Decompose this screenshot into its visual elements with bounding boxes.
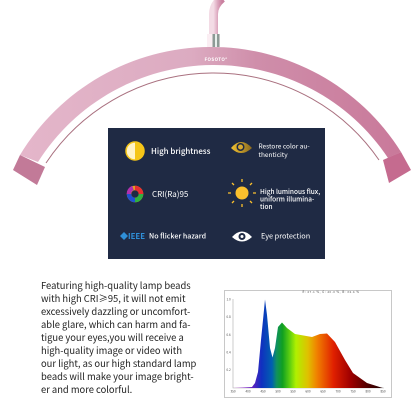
spectrum curve [233, 300, 383, 388]
label: luminous flux: High luminous flux, [260, 186, 320, 196]
spectrum chart [224, 290, 392, 398]
x axis labels: 550 [290, 390, 296, 394]
description text: able glare, which can harm and fa- [41, 317, 190, 331]
axes [233, 299, 384, 388]
lamp [13, 0, 411, 185]
description text: er and more colorful. [41, 382, 132, 396]
x axis labels: 450 [260, 390, 266, 394]
x axis labels [230, 390, 386, 394]
x axis labels: 650 [320, 390, 326, 394]
description text: with high CRI≥95, it will not emit [41, 291, 186, 305]
icon: gold eye [231, 142, 252, 153]
description text: high-quality image or video with [41, 343, 182, 357]
label: eye protection: Eye protection [261, 232, 310, 242]
description text: tigue your eyes,you will receive a [41, 330, 184, 344]
lamp stem [207, 0, 222, 47]
label: luminous flux: uniform illumina- [260, 194, 315, 204]
y axis labels: 0.2 [226, 368, 231, 372]
icon: IEEE logo [120, 231, 145, 242]
lamp arc band [20, 47, 401, 162]
x axis labels: 750 [350, 390, 356, 394]
y axis labels [226, 298, 231, 372]
label: no flicker: No flicker hazard [149, 232, 206, 242]
y axis labels: 0.8 [226, 315, 231, 319]
description text: beads will make your image bright- [41, 369, 194, 383]
label: restore colour: thenticity [258, 149, 288, 159]
description text: excessively dazzling or uncomfort- [41, 304, 190, 318]
label: high brightness: High brightness [151, 146, 211, 157]
icon: sun [228, 179, 256, 207]
brand label: FOSOTO° [205, 57, 227, 63]
icon: white eye [232, 232, 252, 242]
inner diffuser line [46, 73, 379, 163]
icon: brightness circle [126, 142, 144, 160]
right end cap [383, 152, 411, 183]
features panel [108, 128, 325, 259]
x axis labels: 400 [246, 390, 251, 394]
x axis labels: 500 [276, 390, 281, 394]
x axis labels: 800 [366, 390, 371, 394]
y axis labels: 1.0 [226, 298, 231, 302]
x axis labels: 700 [336, 390, 341, 394]
label: restore colour: Restore color au- [258, 140, 310, 150]
description text: Featuring high-quality lamp beads [41, 278, 191, 292]
icon: IEEE logo: IEEE [128, 231, 145, 242]
y axis labels: 0.4 [226, 350, 231, 354]
x axis labels: 850 [380, 390, 386, 394]
left end cap [13, 155, 45, 185]
x axis labels: 350 [230, 390, 236, 394]
icon: colour wheel [129, 188, 141, 200]
chart heading: R: 27.1 %, G: 40.3 %, B: 32.6 % [302, 290, 360, 294]
y axis labels: 0.6 [226, 333, 231, 337]
x axis labels: 600 [306, 390, 311, 394]
label: luminous flux: tion [260, 201, 272, 211]
label: CRI: CRI(Ra)95 [152, 189, 188, 200]
description text: our light, as our high standard lamp [41, 356, 197, 370]
